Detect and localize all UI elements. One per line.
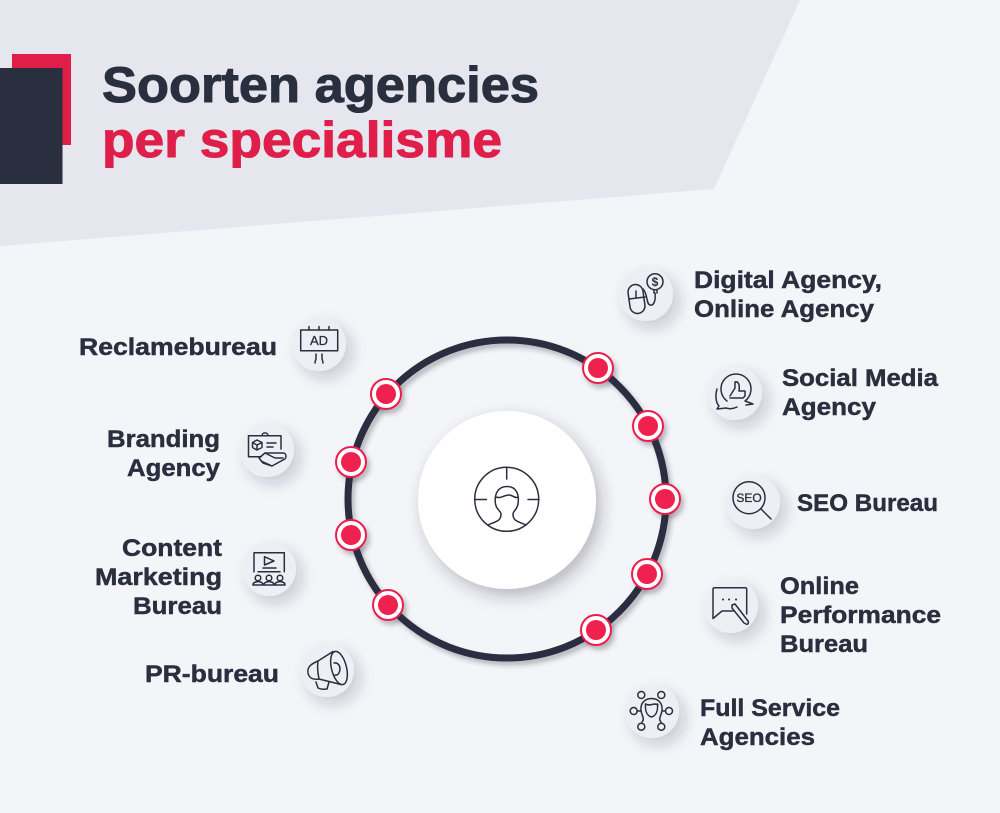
label: Full Service Agencies: Agencies	[700, 724, 815, 751]
label: Social Media Agency	[782, 365, 939, 421]
title	[102, 57, 539, 168]
icon: Content Marketing presentation	[242, 542, 296, 596]
icon: PR megaphone	[300, 643, 354, 697]
label: Full Service Agencies: Full Service	[700, 695, 840, 722]
label: Content Marketing Bureau	[95, 535, 222, 620]
center circle	[418, 411, 596, 589]
label: PR-bureau: PR-bureau	[145, 661, 279, 688]
icon: SEO magnifier: SEO	[736, 491, 762, 505]
label: Online Performance Bureau: Performance	[780, 602, 941, 629]
label: Online Performance Bureau	[780, 573, 941, 658]
icon: SEO magnifier	[726, 475, 780, 529]
label: Content Marketing Bureau: Marketing	[95, 564, 222, 591]
icon: target person	[475, 467, 539, 531]
icon: Digital Agency mouse and coin	[619, 267, 673, 321]
label: Content Marketing Bureau: Content	[122, 535, 222, 562]
label: Reclamebureau: Reclamebureau	[79, 334, 277, 361]
label: Digital Agency: Online Agency	[694, 296, 875, 323]
icon: Full Service network	[625, 684, 679, 738]
label: Online Performance Bureau: Bureau	[780, 631, 868, 658]
label: Full Service Agencies	[700, 695, 840, 751]
label: Content Marketing Bureau: Bureau	[133, 593, 222, 620]
title: Soorten agencies	[102, 57, 539, 113]
icon: Social Media thumbs up	[708, 366, 762, 420]
icon: Reclamebureau billboard	[292, 317, 346, 371]
header band	[0, 0, 800, 246]
icon: Online Performance chat and pencil	[704, 579, 758, 633]
icon: Branding card and hand	[240, 423, 294, 477]
label: Digital Agency: Digital Agency,	[694, 267, 882, 294]
icon: Reclamebureau billboard: AD	[310, 333, 328, 348]
label: SEO Bureau: SEO Bureau	[797, 490, 938, 517]
icon: Digital Agency mouse and coin: $	[652, 275, 659, 289]
header accent squares	[0, 54, 71, 184]
ring markers	[336, 353, 680, 645]
label: Branding Agency	[107, 426, 221, 482]
label: Branding Agency: Branding	[107, 426, 220, 453]
label: Branding Agency: Agency	[127, 455, 221, 482]
label: Online Performance Bureau: Online	[780, 573, 859, 600]
label: Social Media Agency: Social Media	[782, 365, 939, 392]
title: per specialisme	[102, 112, 502, 168]
label: Social Media Agency: Agency	[782, 394, 877, 421]
ring	[348, 340, 666, 658]
label: Digital Agency	[694, 267, 882, 323]
